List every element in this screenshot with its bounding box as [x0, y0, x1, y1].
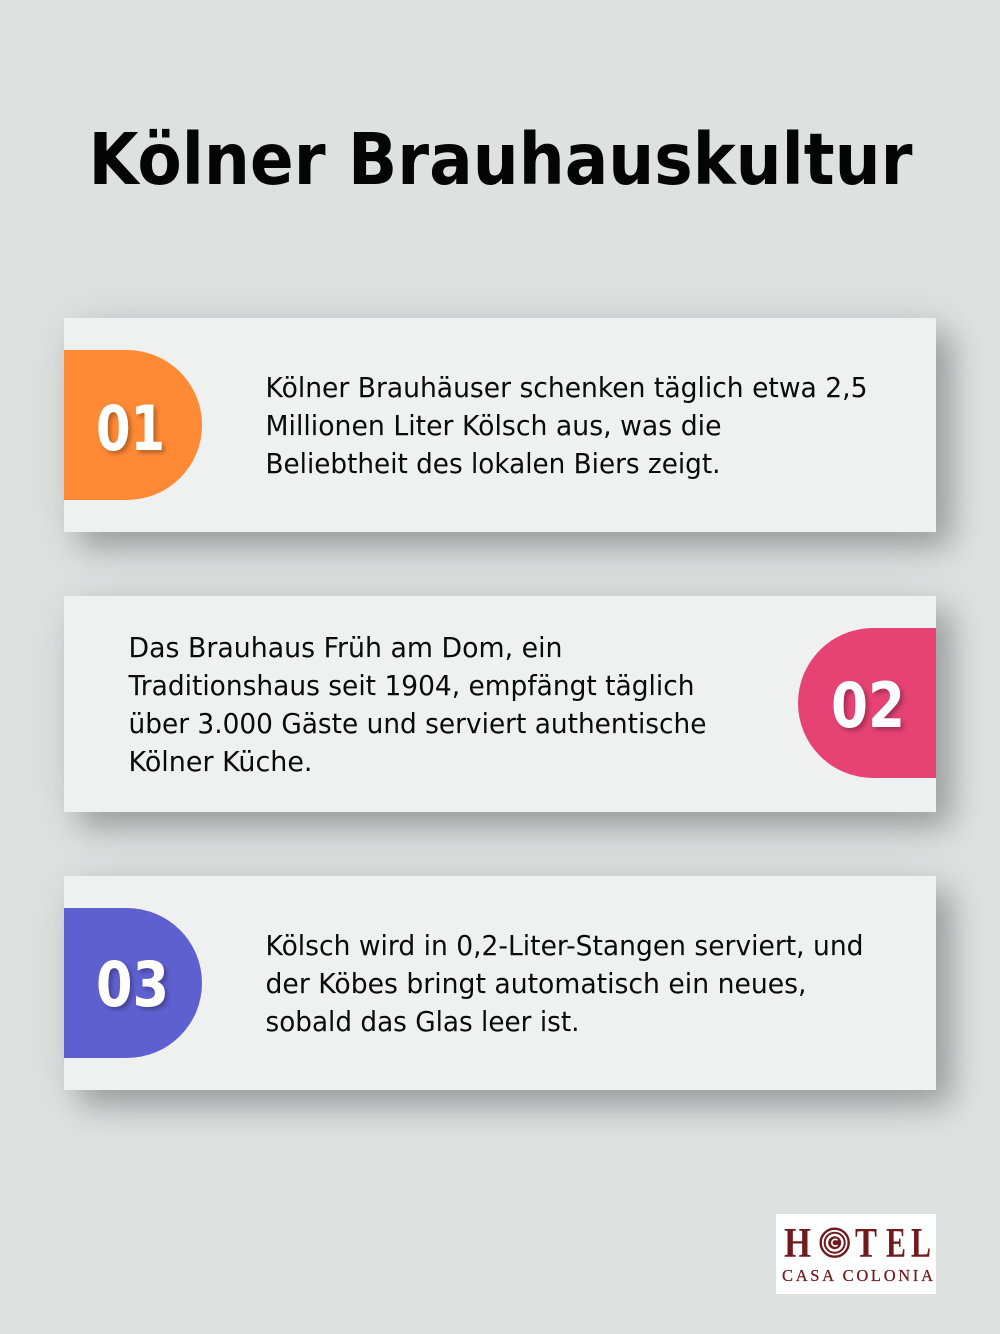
logo: Hotel Casa Colonia: L	[911, 1221, 931, 1267]
panel: card 1	[64, 318, 936, 532]
badge: 02	[798, 628, 936, 778]
text block: card 1	[266, 372, 868, 480]
text block: card 2: Das Brauhaus Früh am Dom, ein	[128, 632, 562, 664]
text block: card 1: Millionen Liter Kölsch aus, was die	[266, 410, 722, 442]
badge: 02: 02	[831, 669, 905, 742]
logo: Hotel Casa Colonia: E	[886, 1221, 906, 1267]
badge: 03	[64, 908, 202, 1058]
badge: 01: 01	[96, 392, 165, 465]
text block: card 2: Kölner Küche.	[128, 746, 312, 778]
logo: Hotel Casa Colonia	[776, 1214, 936, 1294]
text block: card 3	[266, 930, 864, 1038]
text block: card 1: Beliebtheit des lokalen Biers zeigt.	[266, 448, 720, 480]
icon: logo spiral O	[821, 1229, 849, 1257]
text block: card 3: der Köbes bringt automatisch ein neues,	[266, 968, 806, 1000]
badge: 03: 03	[96, 948, 169, 1021]
logo: Hotel Casa Colonia: H	[784, 1221, 811, 1267]
text block: card 2	[128, 632, 706, 778]
text block: card 3: sobald das Glas leer ist.	[266, 1006, 580, 1038]
logo: Hotel Casa Colonia: CASA COLONIA	[782, 1266, 933, 1285]
text block: card 1: Kölner Brauhäuser schenken täglich etwa 2,5	[266, 372, 868, 404]
panel: card 3	[64, 876, 936, 1090]
title: Kölner Brauhauskultur	[88, 118, 913, 201]
badge: 01	[64, 350, 202, 500]
text block: card 2: über 3.000 Gäste und serviert authentische	[128, 708, 706, 740]
panel: card 2	[64, 596, 936, 812]
text block: card 2: Traditionshaus seit 1904, empfängt täglich	[128, 670, 694, 702]
text block: card 3: Kölsch wird in 0,2-Liter-Stangen serviert, und	[266, 930, 864, 962]
logo: Hotel Casa Colonia: T	[855, 1221, 877, 1267]
